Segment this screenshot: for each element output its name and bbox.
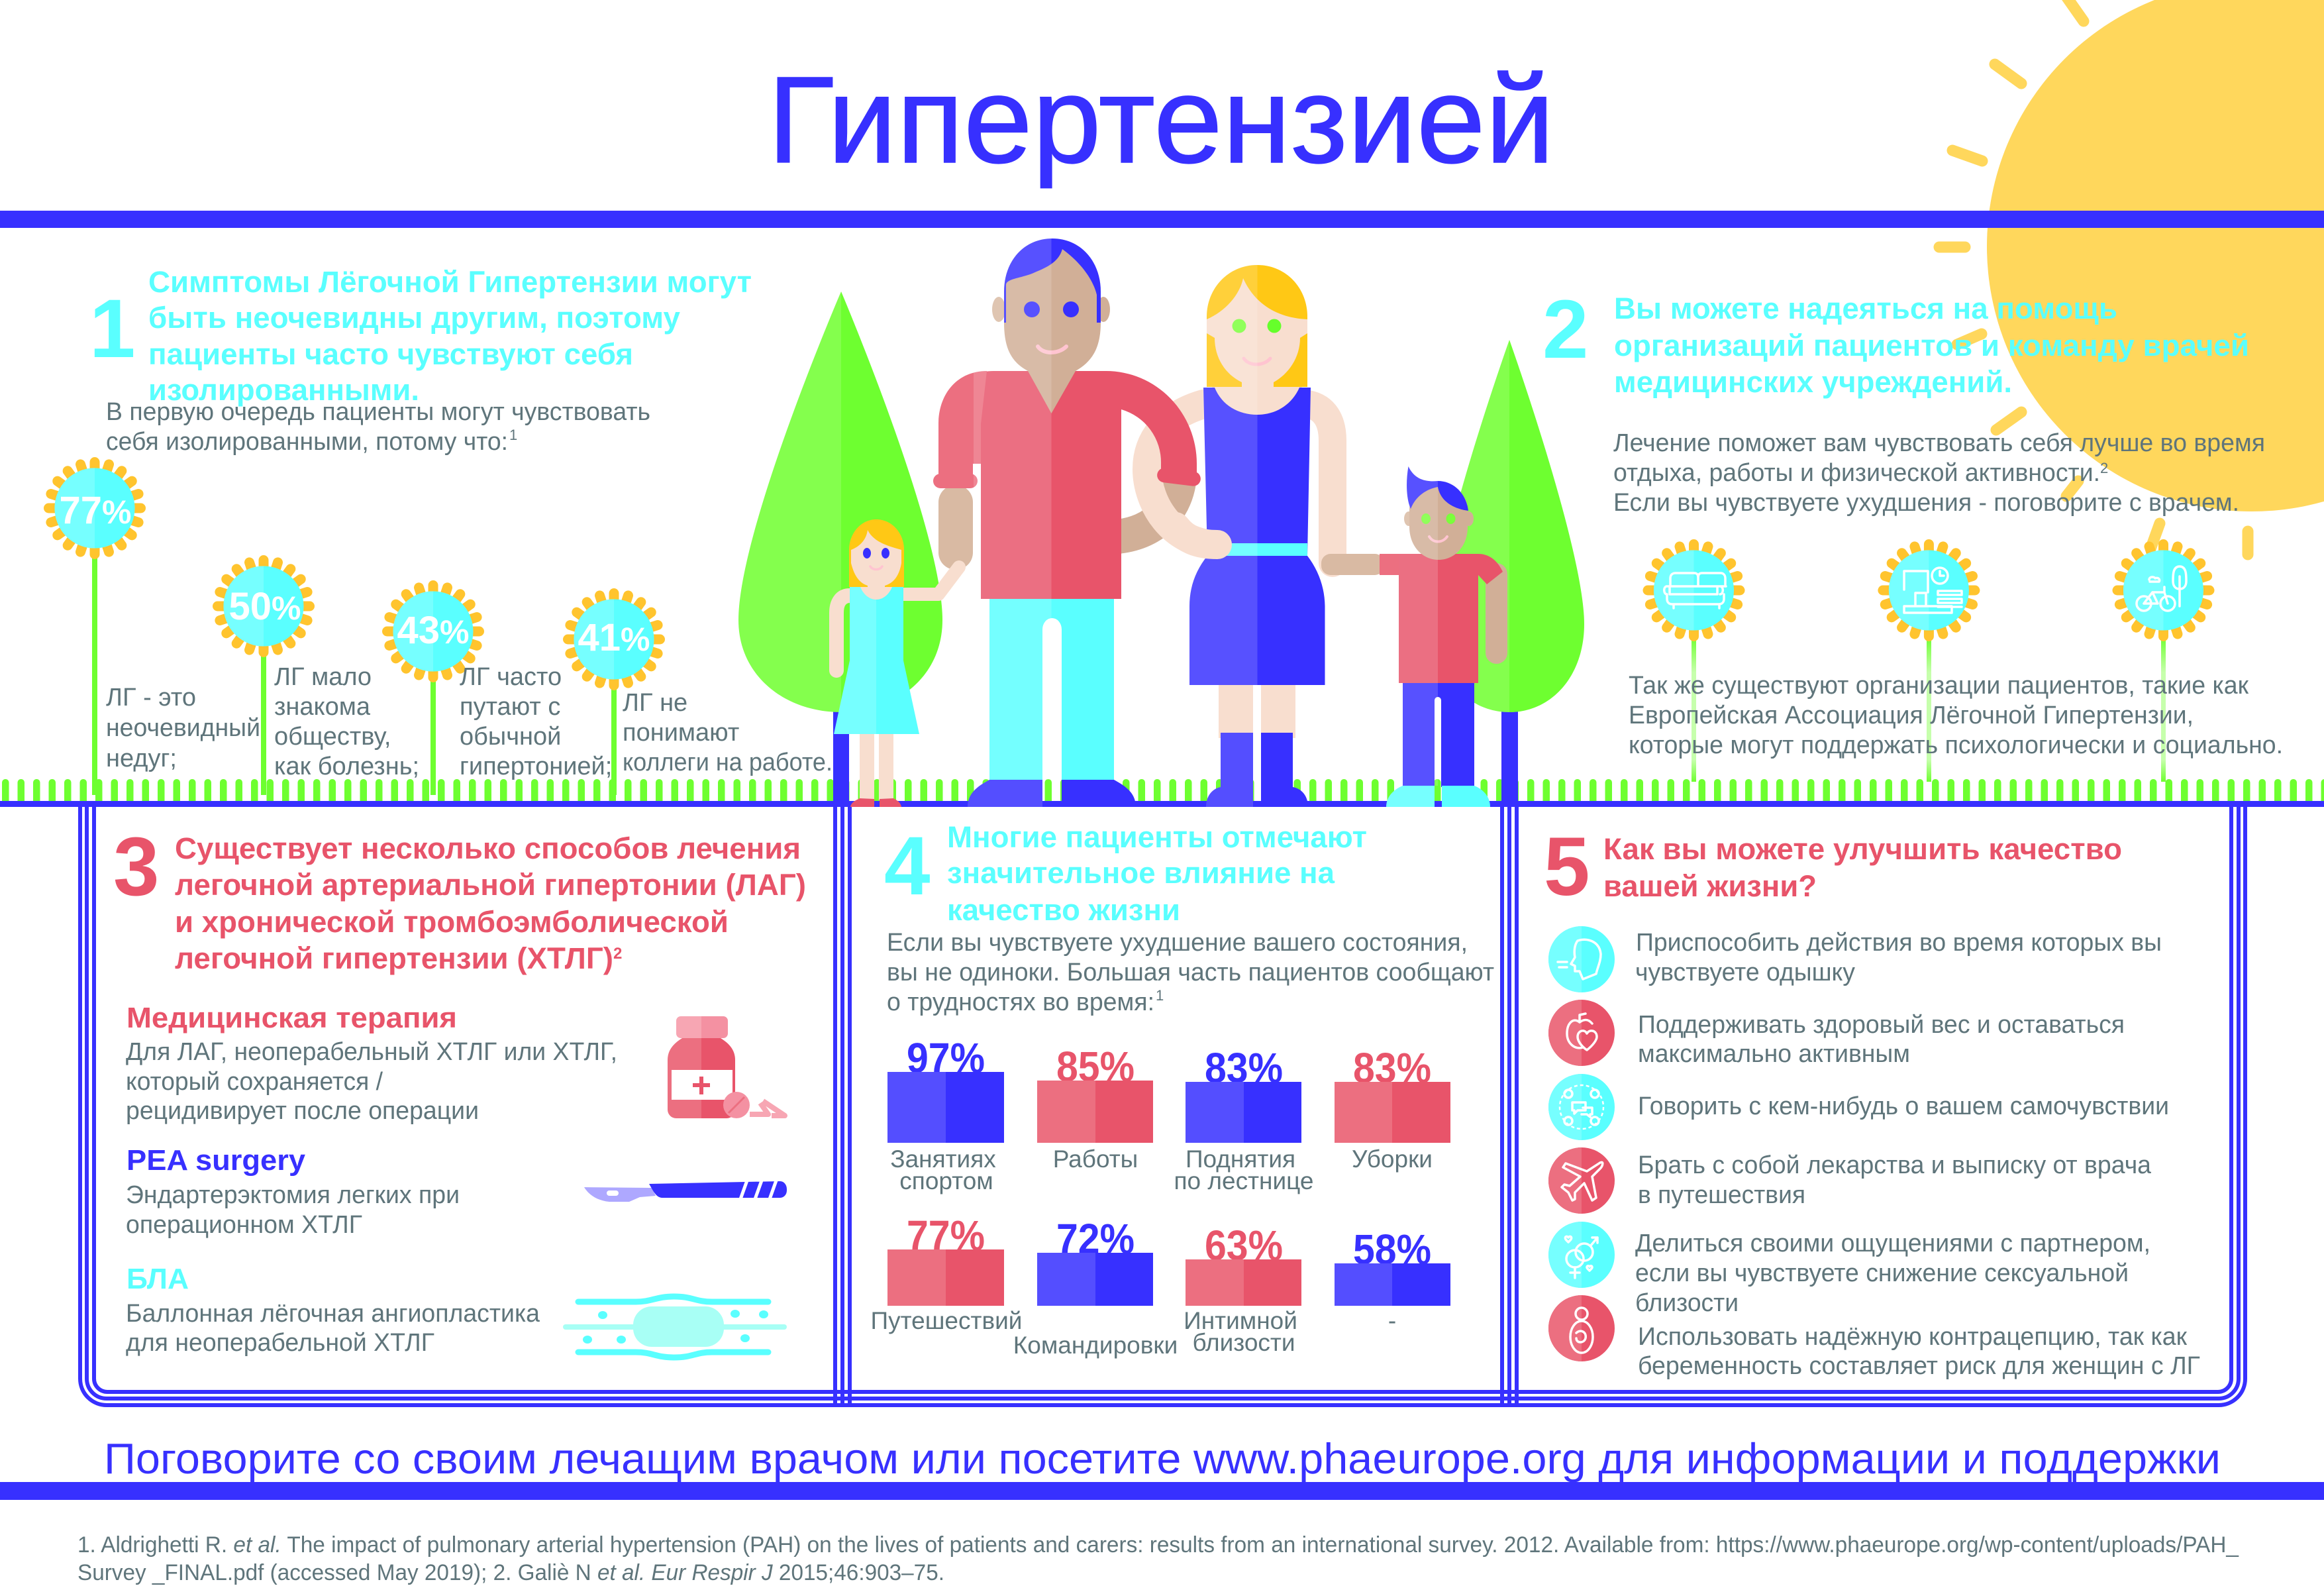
- man eyes: [1024, 301, 1040, 317]
- label 77%: ЛГ - это: [106, 684, 196, 712]
- boy shading: [1399, 464, 1438, 786]
- medical therapy: рецидивирует после операции: [126, 1097, 479, 1125]
- PEA surgery: [126, 1144, 460, 1239]
- heading 3: 2: [613, 945, 622, 963]
- label 77%: [106, 684, 260, 772]
- label 77%: недуг;: [106, 745, 177, 772]
- number 2: 2: [1542, 284, 1589, 376]
- section 1: isolation: [44, 265, 833, 795]
- heading 1: изолированными.: [148, 373, 419, 407]
- grass strip: [0, 779, 2324, 802]
- PEA surgery: операционном ХТЛГ: [126, 1211, 362, 1239]
- woman hair: [1207, 265, 1307, 387]
- bar 83% stairs: 83%: [1205, 1044, 1283, 1092]
- heading 3: легочной артериальной гипертонии (ЛАГ): [175, 868, 806, 902]
- balloon angioplasty: [126, 1263, 540, 1357]
- intro text 4: [887, 929, 1494, 1016]
- intro text: 1: [509, 427, 517, 443]
- panel: improving quality of life: [1544, 821, 2200, 1380]
- woman hand: [1176, 527, 1217, 545]
- intro text 4: о трудностях во время:: [887, 988, 1154, 1016]
- girl: [834, 519, 959, 807]
- bar 83% cleaning: [1335, 1044, 1450, 1173]
- girl legs: [860, 729, 874, 800]
- label 50%: ЛГ мало: [274, 663, 372, 691]
- flower 77%: [44, 457, 146, 795]
- boy shirt: [1380, 554, 1503, 683]
- references: Survey _FINAL.pdf (accessed May 2019); 2. Galiè N et al. Eur Respir J 2015;46:903–75.: [77, 1560, 944, 1585]
- flower 43%: [382, 580, 484, 795]
- medical therapy: Для ЛАГ, неоперабельный ХТЛГ или ХТЛГ,: [126, 1038, 617, 1066]
- bottom blue bar: [0, 1482, 2324, 1500]
- boy hand: [1321, 554, 1384, 575]
- man: [933, 238, 1217, 807]
- heading 4: качество жизни: [947, 893, 1180, 927]
- heading 5: [1603, 832, 2122, 903]
- bar 58%: [1335, 1226, 1450, 1334]
- heading 2: медицинских учреждений.: [1614, 365, 2012, 399]
- text: intimacy: если вы чувствуете снижение сексуальной: [1635, 1259, 2129, 1287]
- man smile: [1038, 346, 1066, 352]
- girl hair: [849, 519, 904, 587]
- intro text: себя изолированными, потому что:: [106, 428, 508, 456]
- woman eyes: [1232, 319, 1246, 333]
- bar 85%: Работы: [1053, 1145, 1138, 1173]
- flower icon: work desk: [1878, 539, 1980, 782]
- text: travel: [1638, 1151, 2152, 1209]
- number 5: 5: [1544, 821, 1590, 913]
- top blue bar: [0, 211, 2324, 228]
- label 77%: неочевидный: [106, 714, 260, 742]
- text: travel: в путешествия: [1638, 1181, 1805, 1209]
- text orgs: [1629, 672, 2283, 759]
- bar 77%: 77%: [907, 1212, 985, 1259]
- woman: [1176, 265, 1333, 807]
- flower icon: sofa: [1642, 539, 1744, 782]
- label 41%: ЛГ не: [623, 689, 687, 717]
- woman belt: [1207, 543, 1307, 556]
- triple line panel frame: [80, 804, 2245, 1405]
- medical therapy: [126, 1002, 617, 1125]
- heading 5: Как вы можете улучшить качество: [1603, 832, 2122, 866]
- intro text 4: Если вы чувствуете ухудшение вашего состояния,: [887, 929, 1468, 957]
- text: travel: Брать с собой лекарства и выписку от врача: [1638, 1151, 2152, 1179]
- man trousers: [989, 599, 1114, 782]
- man forearm: [1105, 482, 1179, 537]
- woman shading: [1203, 265, 1257, 556]
- boy eyes: [1421, 513, 1431, 524]
- text: pregnancy: Использовать надёжную контрацепцию, так как: [1638, 1323, 2187, 1351]
- heading 3: Существует несколько способов лечения: [175, 831, 801, 865]
- heading 4: [947, 820, 1367, 927]
- woman near arm: [1308, 404, 1333, 563]
- bar 85%: 85%: [1056, 1043, 1135, 1090]
- medical therapy: который сохраняется /: [126, 1068, 383, 1096]
- heading 3: и хронической тромбоэмболической: [175, 905, 729, 939]
- boy shoes: [1386, 786, 1435, 807]
- sun: [1939, 0, 2324, 555]
- heading 1: быть неочевидны другим, поэтому: [148, 301, 680, 335]
- text: breathlessness: Приспособить действия во время которых вы: [1636, 929, 2162, 957]
- item: healthy weight: [1548, 1000, 1615, 1066]
- flower 77%: 77%: [60, 489, 131, 532]
- boy head: [1409, 486, 1468, 560]
- item: travel: [1548, 1147, 1615, 1214]
- flower 50%: 50%: [229, 585, 301, 628]
- bar 85%: [1037, 1043, 1153, 1173]
- flower icon: bicycle and tree: [2113, 539, 2215, 782]
- text 2: Если вы чувствуете ухудшения - поговорите с врачем.: [1613, 489, 2239, 517]
- bar 83% stairs: Поднятия: [1186, 1145, 1295, 1173]
- bar 97%: 97%: [907, 1034, 985, 1082]
- bar 97%: спортом: [899, 1167, 993, 1194]
- text: pregnancy: беременность составляет риск для женщин с ЛГ: [1638, 1352, 2200, 1380]
- panel: treatment: [113, 821, 806, 1357]
- item: intimacy: [1548, 1222, 1615, 1288]
- bar 63%: [1184, 1222, 1301, 1356]
- balloon angioplasty: БЛА: [126, 1263, 189, 1295]
- heading 2: организаций пациентов и команду врачей: [1614, 329, 2249, 362]
- flower 41%: 41%: [578, 616, 650, 659]
- text: intimacy: [1635, 1230, 2150, 1317]
- label 50%: как болезнь;: [274, 753, 419, 780]
- label 43%: ЛГ часто: [460, 663, 562, 691]
- girl dress: [834, 587, 876, 734]
- icon: scalpel: [584, 1181, 787, 1202]
- bar 58%: -: [1388, 1307, 1396, 1334]
- PEA surgery: Эндартерэктомия легких при: [126, 1181, 460, 1209]
- references: [77, 1532, 2239, 1585]
- label 50%: обществу,: [274, 723, 391, 751]
- girl smile: [870, 566, 882, 570]
- label 43%: [460, 663, 612, 780]
- icon: balloon in vessel: [566, 1297, 784, 1357]
- number 1: 1: [89, 283, 136, 375]
- bar 83% stairs: [1174, 1044, 1313, 1194]
- label 41%: понимают: [623, 719, 739, 747]
- heading 3: [175, 831, 806, 975]
- man shoes: [968, 780, 1042, 807]
- girl sandals: [850, 798, 874, 807]
- heading 4: значительное влияние на: [947, 856, 1335, 890]
- woman smile: [1244, 358, 1270, 364]
- text: healthy weight: [1638, 1011, 2125, 1068]
- boy ears: [1404, 511, 1413, 526]
- medical therapy: Медицинская терапия: [126, 1002, 457, 1034]
- bar 72%: Командировки: [1013, 1332, 1178, 1359]
- man hair: [1004, 238, 1101, 323]
- man shading: [974, 238, 1052, 780]
- man ears: [992, 297, 1005, 322]
- woman legs: [1219, 685, 1253, 738]
- label 41%: коллеги на работе.: [623, 749, 833, 776]
- text orgs: Так же существуют организации пациентов, такие как: [1629, 672, 2248, 700]
- family illustration: [834, 238, 1507, 807]
- woman dress: [1189, 388, 1325, 685]
- bar 97%: [887, 1034, 1004, 1194]
- bar 83% stairs: по лестнице: [1174, 1167, 1313, 1194]
- text orgs: Европейская Ассоциация Лёгочной Гипертензии,: [1629, 702, 2194, 729]
- item: breathlessness: [1548, 926, 1615, 992]
- PEA surgery: PEA surgery: [126, 1144, 306, 1177]
- flower 43%: 43%: [397, 609, 469, 652]
- bar 58%: 58%: [1353, 1226, 1431, 1273]
- intro text: [106, 398, 650, 456]
- text: breathlessness: [1635, 929, 2162, 986]
- text: intimacy: близости: [1635, 1289, 1739, 1317]
- number 4: 4: [884, 820, 931, 912]
- flower 41%: [563, 588, 665, 795]
- panel: quality of life: [871, 820, 1494, 1359]
- flower 50%: [213, 555, 315, 795]
- heading 5: вашей жизни?: [1603, 869, 1817, 903]
- label 50%: знакома: [274, 693, 371, 721]
- bar 77%: Путешествий: [871, 1307, 1022, 1334]
- girl face: [851, 530, 901, 587]
- girl eyes: [863, 548, 871, 558]
- heading 1: пациенты часто чувствуют себя: [148, 337, 633, 371]
- woman face: [1207, 278, 1307, 387]
- intro text 4: вы не одиноки. Большая часть пациентов сообщают: [887, 959, 1494, 986]
- boy hair: [1407, 466, 1468, 511]
- bar 63%: Интимной: [1184, 1307, 1297, 1334]
- label 43%: гипертонией;: [460, 753, 612, 780]
- heading 2: Вы можете надеяться на помощь: [1614, 291, 2117, 325]
- heading 1: Симптомы Лёгочной Гипертензии могут: [148, 265, 752, 299]
- heading 4: Многие пациенты отмечают: [947, 820, 1367, 854]
- balloon angioplasty: для неоперабельной ХТЛГ: [126, 1329, 434, 1357]
- boy: [1321, 464, 1507, 807]
- heading 3: легочной гипертензии (ХТЛГ): [175, 941, 613, 975]
- title: Гипертензией: [768, 52, 1554, 189]
- label 50%: [274, 663, 419, 780]
- number 3: 3: [113, 821, 160, 913]
- label 41%: [623, 689, 833, 776]
- left tree: [738, 291, 942, 807]
- item: pregnancy: [1548, 1295, 1615, 1361]
- item: talking: [1548, 1074, 1615, 1140]
- boy smile: [1429, 537, 1447, 542]
- bar 83% cleaning: 83%: [1353, 1044, 1431, 1092]
- boy trousers: [1403, 683, 1474, 787]
- balloon angioplasty: Баллонная лёгочная ангиопластика: [126, 1300, 540, 1328]
- text: breathlessness: чувствуете одышку: [1635, 959, 1855, 986]
- text: intimacy: Делиться своими ощущениями с партнером,: [1635, 1230, 2150, 1257]
- man body: [938, 371, 1197, 599]
- text 2: Лечение поможет вам чувствовать себя лучше во время: [1613, 429, 2265, 457]
- text: talking: Говорить с кем-нибудь о вашем самочувствии: [1638, 1092, 2169, 1120]
- text orgs: которые могут поддержать психологически и социально.: [1629, 731, 2283, 759]
- call to action: Поговорите со своим лечащим врачом или посетите www.phaeurope.org для информации и поддержки: [104, 1434, 2221, 1483]
- girl neck: [858, 587, 894, 600]
- bar 97%: Занятиях: [890, 1145, 996, 1173]
- ground line: [0, 801, 2324, 807]
- boy arm: [1486, 563, 1507, 664]
- text 2: 2: [2100, 460, 2108, 476]
- man face: [1004, 249, 1101, 413]
- bar 63%: 63%: [1205, 1222, 1283, 1269]
- references: 1. Aldrighetti R. et al. The impact of pulmonary arterial hypertension (PAH) on the lives of patients and carers: results from an international survey. 2012. Available from: https://www.phaeurope.org/wp-content/uploads/PAH_: [77, 1532, 2239, 1558]
- heading 2: [1614, 291, 2249, 399]
- bar 83% cleaning: Уборки: [1352, 1145, 1433, 1173]
- label 43%: обычной: [460, 723, 561, 751]
- text: healthy weight: Поддерживать здоровый вес и оставаться: [1638, 1011, 2125, 1039]
- right tree: [1435, 340, 1584, 807]
- bar 77%: [871, 1212, 1022, 1334]
- text: pregnancy: [1638, 1323, 2200, 1380]
- intro text 4: 1: [1156, 987, 1164, 1004]
- bar 72%: 72%: [1056, 1215, 1135, 1263]
- girl arms: [836, 596, 850, 670]
- section 2: support: [1542, 284, 2283, 782]
- label 43%: путают с: [460, 693, 560, 721]
- heading 1: [148, 265, 752, 407]
- woman neck: [1212, 387, 1302, 415]
- bar 72%: [1013, 1215, 1178, 1359]
- text: healthy weight: максимально активным: [1638, 1040, 1910, 1068]
- woman far arm: [1147, 404, 1217, 545]
- man left arm: [938, 371, 987, 480]
- man right cuff: [1156, 467, 1201, 487]
- icon: medicine bottle: [668, 1016, 785, 1118]
- bar 63%: близости: [1192, 1329, 1295, 1356]
- woman boots: [1206, 733, 1253, 807]
- intro text: В первую очередь пациенты могут чувствовать: [106, 398, 650, 426]
- text 2: [1613, 429, 2265, 517]
- text 2: отдыха, работы и физической активности.: [1613, 459, 2100, 487]
